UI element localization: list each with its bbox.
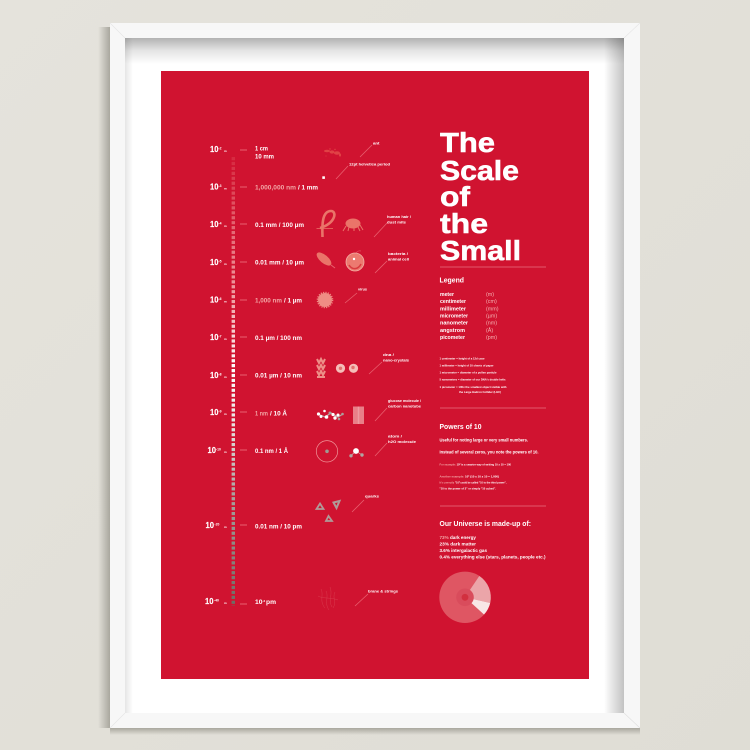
scale exponents: -10 [216, 448, 221, 452]
universe composition list: 3.6% intergalactic gas [440, 548, 487, 553]
legend units: micrometer [440, 314, 469, 320]
scale exponents: m [224, 300, 227, 304]
icon: carbon nanotube [353, 406, 364, 424]
powers of 10 explanation [440, 438, 538, 454]
scale exponents: 10 [210, 294, 219, 304]
legend comparisons: the Large Hadron Collider (LHC) [459, 390, 501, 394]
scale exponents: 10 [210, 144, 219, 154]
icon: virus [317, 292, 333, 308]
specimen labels: ant [373, 142, 380, 146]
scale length values: 0.1 nm / 1 Å [255, 446, 288, 455]
powers of 10 heading: Powers of 10 [440, 422, 482, 431]
scale exponents: -9 [218, 410, 222, 414]
icon: helvetica period [322, 176, 325, 179]
scale length values: 1,000,000 nm [255, 184, 296, 192]
title: of [440, 181, 471, 212]
specimen labels: bacteria / [388, 252, 408, 256]
scale length values [255, 146, 318, 606]
icon: bacteria [315, 250, 335, 268]
universe composition list [440, 535, 546, 560]
scale exponents: m [224, 337, 227, 341]
icon: animal cell [346, 251, 364, 271]
powers of 10 explanation: Useful for noting large or very small numbers. [440, 438, 528, 442]
scale exponents: -7 [218, 334, 222, 338]
scale exponents: m [224, 450, 227, 454]
scale exponents: m [224, 186, 227, 190]
specimen labels: brane & strings [368, 590, 398, 594]
scale length values: / 1 µm [284, 297, 302, 304]
specimen labels: animal cell [388, 258, 409, 262]
picture frame [98, 23, 640, 735]
scale length values: 1 cm [255, 146, 268, 152]
specimen labels: glucose molecule / [388, 399, 421, 403]
scale exponents: m [224, 525, 227, 529]
scale length values: pm [266, 599, 276, 606]
scale length values: 1 nm [255, 410, 268, 417]
red poster panel [161, 71, 589, 679]
universe heading: Our Universe is made-up of: [440, 519, 531, 528]
legend units: (µm) [486, 314, 497, 320]
scale exponents: 10 [210, 407, 219, 417]
scale exponents: 10 [210, 257, 219, 267]
legend units: (cm) [486, 299, 497, 305]
legend units: (m) [486, 292, 494, 298]
icon: dna [317, 359, 325, 377]
legend units: (Å) [486, 327, 493, 334]
scale length values: 0.01 µm / 10 nm [255, 373, 302, 380]
specimen labels: h2O molecule [388, 440, 416, 444]
legend units: meter [440, 292, 455, 298]
scale length values: 0.1 µm / 100 nm [255, 335, 302, 342]
legend comparisons: 1 picometer = 100x the smallest object visible with [440, 385, 507, 389]
scale length values: / 10 Å [270, 408, 287, 417]
title: Small [440, 235, 521, 266]
scale exponents: 10 [205, 596, 214, 606]
specimen labels: 12pt helvetica period [349, 162, 390, 166]
legend comparisons: 1 millimeter = height of 10 sheets of paper [440, 364, 494, 368]
scale tick marks [240, 150, 247, 604]
icon: human hair [316, 211, 334, 237]
powers of 10 examples [440, 462, 511, 490]
specimen labels: dna / [383, 353, 394, 357]
scale exponents: m [224, 149, 227, 153]
scale length values: 0.1 mm / 100 µm [255, 222, 304, 229]
leader lines [336, 145, 387, 606]
icon: ant [324, 148, 341, 157]
specimen labels: human hair / [387, 215, 411, 219]
scale exponents [205, 144, 227, 606]
dotted scale column [232, 157, 235, 606]
scale exponents: 10 [208, 445, 216, 455]
icon: nano-crystals [336, 364, 358, 373]
icon: glucose molecule [317, 410, 344, 420]
scale exponents: -5 [218, 260, 222, 264]
title: The [440, 127, 495, 158]
scale exponents: -4 [218, 222, 222, 226]
legend units: picometer [440, 335, 466, 341]
specimen labels: quarks [365, 494, 379, 498]
scale exponents: m [224, 412, 227, 416]
scale exponents: -6 [218, 297, 222, 301]
icon: atom [316, 441, 338, 462]
scale exponents: m [224, 224, 227, 228]
legend comparisons [440, 356, 507, 394]
specimen labels: virus [358, 288, 367, 292]
specimen labels [349, 142, 421, 594]
scale length values: 10 [255, 599, 263, 606]
specimen labels: nano-crystals [383, 358, 409, 362]
legend comparisons: 1 centimeter = height of a 12d case [440, 356, 485, 360]
legend units: nanometer [440, 321, 469, 327]
scale exponents: m [224, 375, 227, 379]
specimen labels: dust mite [387, 220, 406, 224]
legend comparisons: 1 micrometer = diameter of a pollen particle [440, 370, 497, 374]
specimen labels: atom / [388, 434, 402, 438]
universe composition list: 0.4% everything else (stars, planets, people etc.) [440, 555, 546, 560]
legend heading: Legend [440, 276, 464, 284]
scale exponents: -8 [218, 372, 222, 376]
scale length values: 0.01 mm / 10 µm [255, 260, 304, 267]
scale length values: 10 mm [255, 154, 274, 160]
scale exponents: 10 [210, 332, 219, 342]
scale exponents: -40 [214, 598, 219, 602]
specimen labels: carbon nanotube [388, 404, 421, 408]
icon: quarks [316, 501, 340, 521]
powers of 10 examples: It's correctly "10³ could be called "10 to the third power", [440, 480, 507, 484]
legend comparisons: 5 nanometers = diameter of our DNA's double helix [440, 378, 506, 382]
scale exponents: m [224, 601, 227, 605]
scale exponents: -20 [214, 522, 220, 526]
legend units: (mm) [486, 306, 499, 312]
powers of 10 examples: "10 to the power of 3" or simply "10 cubed". [440, 486, 496, 490]
scale length values: -2 [262, 599, 265, 603]
universe composition list: 73% dark energy [440, 535, 476, 540]
legend units: (pm) [486, 335, 497, 341]
powers of 10 examples: For example: 10² is a smarter way of writing 10 x 10 = 100 [440, 462, 511, 466]
legend units [440, 292, 499, 341]
scale exponents: -2 [218, 146, 222, 150]
powers of 10 explanation: Instead of several zeros, you note the powers of 10. [440, 450, 538, 454]
legend units: angstrom [440, 328, 465, 334]
scale exponents: 10 [210, 182, 219, 192]
icon: dust mite [343, 218, 363, 231]
title: Scale [440, 155, 519, 186]
scale length values: / 1 mm [298, 184, 318, 192]
pie chart: universe composition [439, 572, 491, 623]
legend units: millimeter [440, 306, 467, 312]
scale length values: 1,000 nm [255, 297, 282, 304]
icon: brane and strings [318, 587, 338, 610]
scale exponents: 10 [210, 219, 219, 229]
title [440, 127, 521, 266]
legend units: (nm) [486, 321, 497, 327]
scale exponents: 10 [206, 520, 214, 530]
scale exponents: m [224, 262, 227, 266]
powers of 10 examples: Another example: 10³ (10 x 10 x 10 = 1,000) [440, 474, 499, 478]
scale exponents: 10 [210, 370, 219, 380]
legend units: centimeter [440, 299, 467, 305]
icon: h2o molecule [349, 448, 364, 457]
scale length values: 0.01 nm / 10 pm [255, 524, 302, 530]
universe composition list: 23% dark matter [440, 542, 476, 547]
scale exponents: -3 [218, 184, 222, 188]
title: the [440, 208, 488, 239]
